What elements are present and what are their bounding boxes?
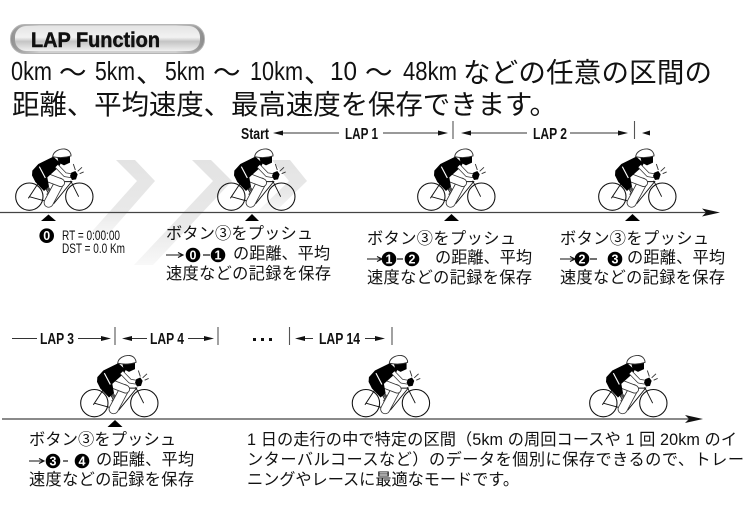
- start readout: [39, 227, 125, 256]
- title badge: LAP Function: [10, 24, 204, 54]
- heading text: ～: [365, 57, 392, 88]
- note: button push lap 3-4: 速度などの記録を保存: [29, 471, 194, 489]
- heading text: ～: [59, 57, 86, 88]
- description text: [247, 431, 744, 489]
- heading text: [11, 56, 712, 120]
- cyclist 1: [16, 149, 93, 210]
- note: button push lap 0-1: ボタン③をプッシュ: [166, 225, 313, 243]
- start readout: 0: [43, 229, 50, 243]
- lap markers row 2: LAP 14: [319, 331, 360, 348]
- cyclist 3: [418, 149, 495, 210]
- lap markers row 1: LAP 1: [345, 126, 378, 143]
- note: button push lap 1-2: 1: [386, 252, 393, 266]
- note: button push lap 0-1: [166, 225, 331, 283]
- cyclist 6: [352, 355, 430, 417]
- lap markers row 1: LAP 2: [533, 126, 567, 143]
- heading text: ～: [213, 57, 240, 88]
- note: button push lap 0-1: の距離、平均: [233, 245, 330, 263]
- note: button push lap 0-1: 1: [215, 248, 222, 262]
- note: button push lap 1-2: ボタン③をプッシュ: [367, 230, 516, 248]
- note: button push lap 3-4: ボタン③をプッシュ: [29, 431, 176, 449]
- description text: 1 日の走行の中で特定の区間（5km の周回コースや 1 回 20km のイ: [247, 431, 737, 449]
- timeline 1: [0, 208, 720, 216]
- lap push marker row 2: [108, 420, 122, 427]
- heading text: 10: [330, 56, 357, 86]
- lap markers row 2: LAP 3: [40, 331, 74, 348]
- heading text: 10km: [250, 56, 303, 86]
- heading text: 5km: [165, 56, 205, 86]
- lap markers row 2: LAP 4: [150, 331, 184, 348]
- note: button push lap 2-3: [560, 230, 725, 287]
- start readout: RT = 0:00:00: [62, 227, 120, 243]
- note: button push lap 2-3: ボタン③をプッシュ: [560, 230, 709, 248]
- note: button push lap 2-3: 2: [579, 252, 586, 266]
- note: button push lap 3-4: 4: [79, 454, 86, 468]
- note: button push lap 1-2: 速度などの記録を保存: [367, 269, 532, 287]
- note: button push lap 1-2: [367, 230, 532, 287]
- note: button push lap 2-3: の距離、平均: [627, 249, 725, 267]
- heading text: 48km: [403, 56, 457, 86]
- description text: ンターバルコースなど）のデータを個別に保存できるので、トレー: [247, 450, 744, 469]
- heading text: 、: [136, 57, 164, 88]
- lap push markers row 1: [41, 214, 640, 221]
- start readout: DST = 0.0 Km: [62, 240, 125, 256]
- timeline 2: [2, 415, 703, 423]
- title badge: LAP Function: LAP Function: [31, 28, 160, 52]
- cyclist 4: [599, 149, 676, 210]
- heading text: 距離、平均速度、最高速度を保存できます。: [12, 89, 557, 120]
- heading text: 5km: [95, 56, 135, 86]
- cyclist 5: [81, 355, 158, 417]
- heading text: 0km: [11, 56, 52, 86]
- note: button push lap 1-2: の距離、平均: [435, 249, 532, 267]
- note: button push lap 2-3: 速度などの記録を保存: [560, 269, 725, 287]
- note: button push lap 3-4: の距離、平均: [96, 451, 194, 469]
- note: button push lap 3-4: [29, 431, 194, 489]
- heading text: 、: [304, 57, 332, 88]
- note: button push lap 0-1: 速度などの記録を保存: [166, 265, 331, 283]
- background chevrons: [86, 160, 307, 265]
- description text: ニングやレースに最適なモードです。: [247, 471, 519, 489]
- note: button push lap 2-3: 3: [612, 252, 619, 266]
- heading text: などの任意の区間の: [463, 57, 712, 88]
- note: button push lap 0-1: 0: [190, 248, 197, 262]
- cyclist 2: [218, 149, 295, 210]
- note: button push lap 1-2: 2: [409, 252, 416, 266]
- note: button push lap 3-4: 3: [50, 454, 57, 468]
- lap markers row 2: [12, 327, 392, 348]
- lap markers row 1: Start: [241, 126, 269, 143]
- cyclist 7: [590, 355, 667, 417]
- lap markers row 1: [241, 121, 650, 143]
